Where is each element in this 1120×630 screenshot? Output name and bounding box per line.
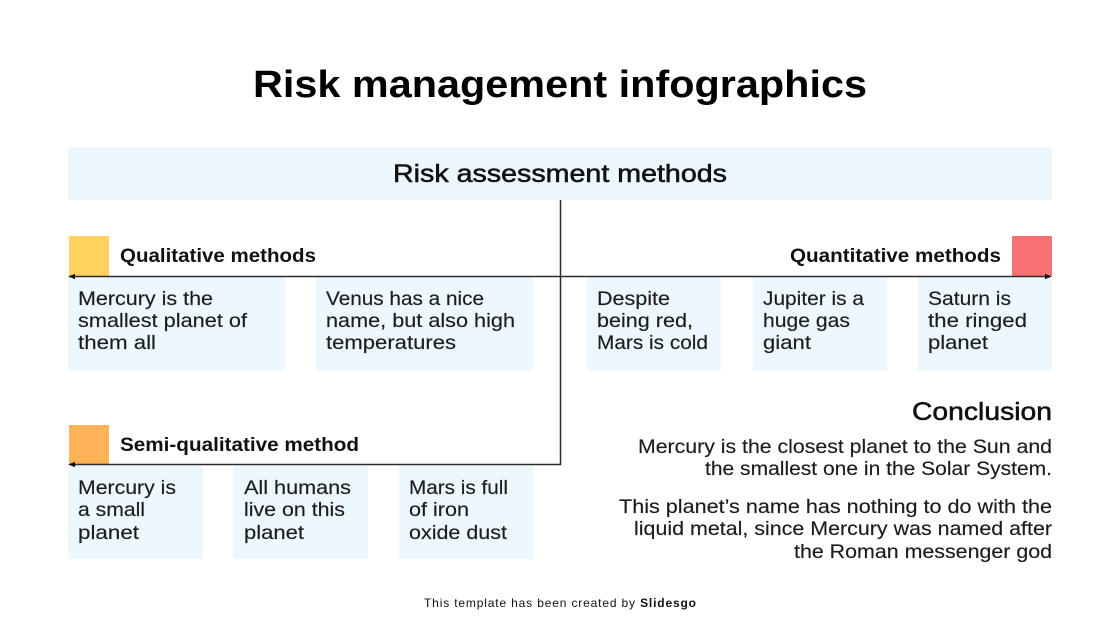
card: Jupiter: giant [763,332,812,354]
card: Jupiter: huge gas [763,310,850,332]
card: small planet: Mercury is [78,477,176,499]
heading: conclusion: Conclusion [912,398,1052,426]
icon: red square [1012,236,1052,276]
card: small planet: planet [78,522,140,544]
card: humans: live on this [244,499,345,521]
text block: conclusion: Mercury is the closest planet to the Sun and [638,436,1052,458]
card: small planet [68,466,203,559]
panel: risk assessment methods header [68,147,1052,200]
icon: orange square [69,425,109,464]
card: Jupiter [753,277,887,371]
title: Risk management infographics [253,64,867,106]
card: iron oxide: of iron [409,499,469,521]
panel: semi-qualitative method [68,425,533,559]
card: humans [233,466,368,559]
card: Saturn: the ringed [928,310,1027,332]
panel: risk assessment methods header: Risk assessment methods [393,160,727,188]
card: Mercury: them all [78,332,156,354]
card: small planet: a small [78,499,145,521]
card: Mercury: smallest planet of [78,310,248,332]
card: Saturn [918,277,1052,371]
card: humans: planet [244,522,305,544]
card: Mars: Despite [597,288,670,310]
card: iron oxide: oxide dust [409,522,508,544]
card: Mercury [68,277,285,371]
panel: quantitative methods [587,236,1052,371]
card: Mars: Mars is cold [597,332,708,354]
card: Venus: Venus has a nice [326,288,484,310]
text block: conclusion: liquid metal, since Mercury was named after [634,518,1053,540]
card: Saturn: Saturn is [928,288,1011,310]
text block: conclusion: the Roman messenger god [794,541,1052,563]
card: iron oxide [399,466,533,559]
card: Venus [316,277,533,371]
card: Mars: being red, [597,310,693,332]
heading: quantitative methods: Quantitative methods [790,246,1001,267]
heading: semi-qualitative method: Semi-qualitative method [120,435,359,456]
card: iron oxide: Mars is full [409,477,508,499]
icon: yellow square [69,236,109,276]
card: Jupiter: Jupiter is a [763,288,864,310]
card: humans: All humans [244,477,351,499]
panel: qualitative methods [68,236,533,371]
text block: conclusion: This planet’s name has nothing to do with the [619,496,1052,518]
card: Saturn: planet [928,332,989,354]
arrows: connector tree [68,200,1052,467]
card: Mars [587,277,721,371]
heading: qualitative methods: Qualitative methods [120,246,316,267]
card: Venus: temperatures [326,332,456,354]
card: Mercury: Mercury is the [78,288,213,310]
card: Venus: name, but also high [326,310,515,332]
text block: conclusion [619,398,1053,563]
text block: conclusion: the smallest one in the Solar System. [705,458,1052,480]
footer credit: This template has been created by Slidesgo [424,596,696,610]
